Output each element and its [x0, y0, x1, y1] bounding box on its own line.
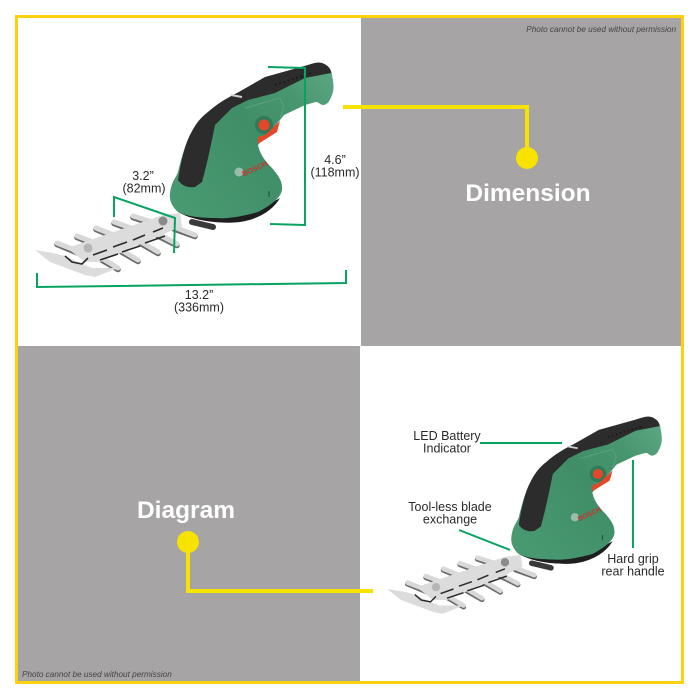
panel: top-right grey [361, 17, 683, 346]
label: length: 13.2” [185, 288, 213, 302]
label: Hard grip rear handle: rear handle [601, 564, 665, 578]
length bracket [37, 270, 346, 287]
callout line: handle [632, 460, 634, 548]
callout line: blade [459, 530, 510, 550]
label: LED Battery Indicator: LED Battery [413, 429, 481, 443]
label: height: (118mm) [310, 166, 360, 180]
dimension lines [37, 67, 346, 287]
panel: bottom-left grey [17, 346, 360, 682]
tool photo: dimension view [35, 63, 334, 277]
height bracket [268, 67, 305, 225]
label: height: 4.6” [324, 153, 346, 167]
tool photo: diagram view [387, 417, 662, 614]
heading: Dimension: Dimension [465, 180, 591, 207]
label: Tool-less blade exchange: exchange [423, 512, 477, 526]
note: top permission: Photo cannot be used without permission [526, 25, 676, 34]
heading: Diagram: Diagram [137, 497, 235, 524]
arrow: diagram connector [177, 531, 373, 591]
label: Hard grip rear handle: Hard grip [607, 552, 659, 566]
arrow: dimension connector [343, 107, 538, 169]
note: bottom permission: Photo cannot be used without permission [22, 670, 172, 679]
callout line: LED [480, 442, 562, 444]
depth bracket [114, 197, 175, 253]
callout lines [459, 443, 633, 550]
label: depth: (82mm) [122, 182, 166, 196]
tool photo: dimension view: BOSCH [241, 159, 269, 178]
label: depth: 3.2” [132, 169, 154, 183]
label: length: (336mm) [174, 300, 224, 314]
tool photo: diagram view: BOSCH [577, 506, 603, 523]
label: LED Battery Indicator: Indicator [423, 442, 471, 456]
label: Tool-less blade exchange: Tool-less blade [408, 500, 492, 514]
